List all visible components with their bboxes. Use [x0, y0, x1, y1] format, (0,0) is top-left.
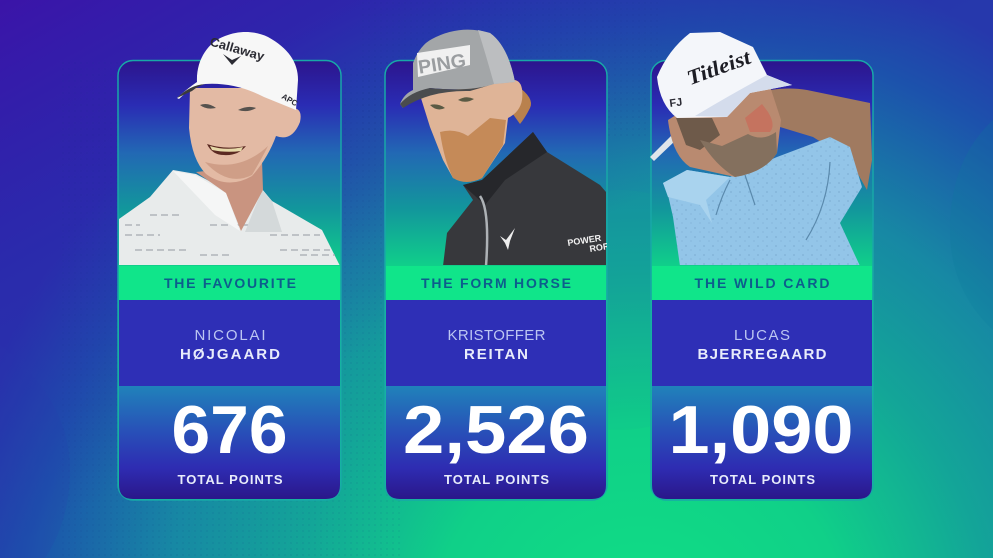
label band [652, 266, 872, 300]
player photo: Kristoffer Reitan: ROR [589, 241, 611, 254]
name panel: KRISTOFFER [448, 327, 546, 344]
name panel: LUCAS [734, 327, 790, 344]
card background [651, 60, 873, 500]
name panel: HØJGAARD [180, 346, 280, 363]
player photo: Kristoffer Reitan: POWER [567, 233, 602, 248]
stat panel: 2,526 [403, 392, 589, 468]
card background [385, 60, 607, 500]
stat panel [652, 386, 872, 499]
label: THE FORM HORSE [421, 275, 571, 291]
name panel [386, 300, 606, 386]
stat panel: 676 [172, 392, 288, 468]
stat panel: 1,090 [668, 392, 854, 468]
label: THE WILD CARD [694, 275, 830, 291]
player photo: Nicolai Hojgaard [119, 32, 340, 266]
label band [119, 266, 340, 300]
panel: the favourite card [118, 32, 341, 500]
player photo: Lucas Bjerregaard: FJ [669, 96, 683, 110]
stat panel: TOTAL POINTS [178, 472, 283, 487]
name panel: NICOLAI [194, 327, 266, 344]
label: THE FAVOURITE [164, 275, 296, 291]
stat panel: TOTAL POINTS [710, 472, 815, 487]
name panel: BJERREGAARD [698, 346, 827, 363]
stat panel: TOTAL POINTS [444, 472, 549, 487]
stat panel [119, 386, 340, 499]
label band [386, 266, 606, 300]
name panel: REITAN [464, 346, 528, 363]
name panel [119, 300, 340, 386]
card background [118, 60, 341, 500]
player photo: Nicolai Hojgaard: Callaway [208, 35, 266, 64]
panel: the wild card [650, 32, 873, 500]
player photo: Lucas Bjerregaard: Titleist [683, 44, 755, 90]
cap logo: PING [417, 50, 467, 79]
player photo: Kristoffer Reitan [400, 30, 611, 266]
stat panel [386, 386, 606, 499]
name panel [652, 300, 872, 386]
player photo: Nicolai Hojgaard: APC [280, 92, 299, 108]
panel: the form horse card [385, 30, 611, 500]
player photo: Lucas Bjerregaard [650, 32, 872, 266]
